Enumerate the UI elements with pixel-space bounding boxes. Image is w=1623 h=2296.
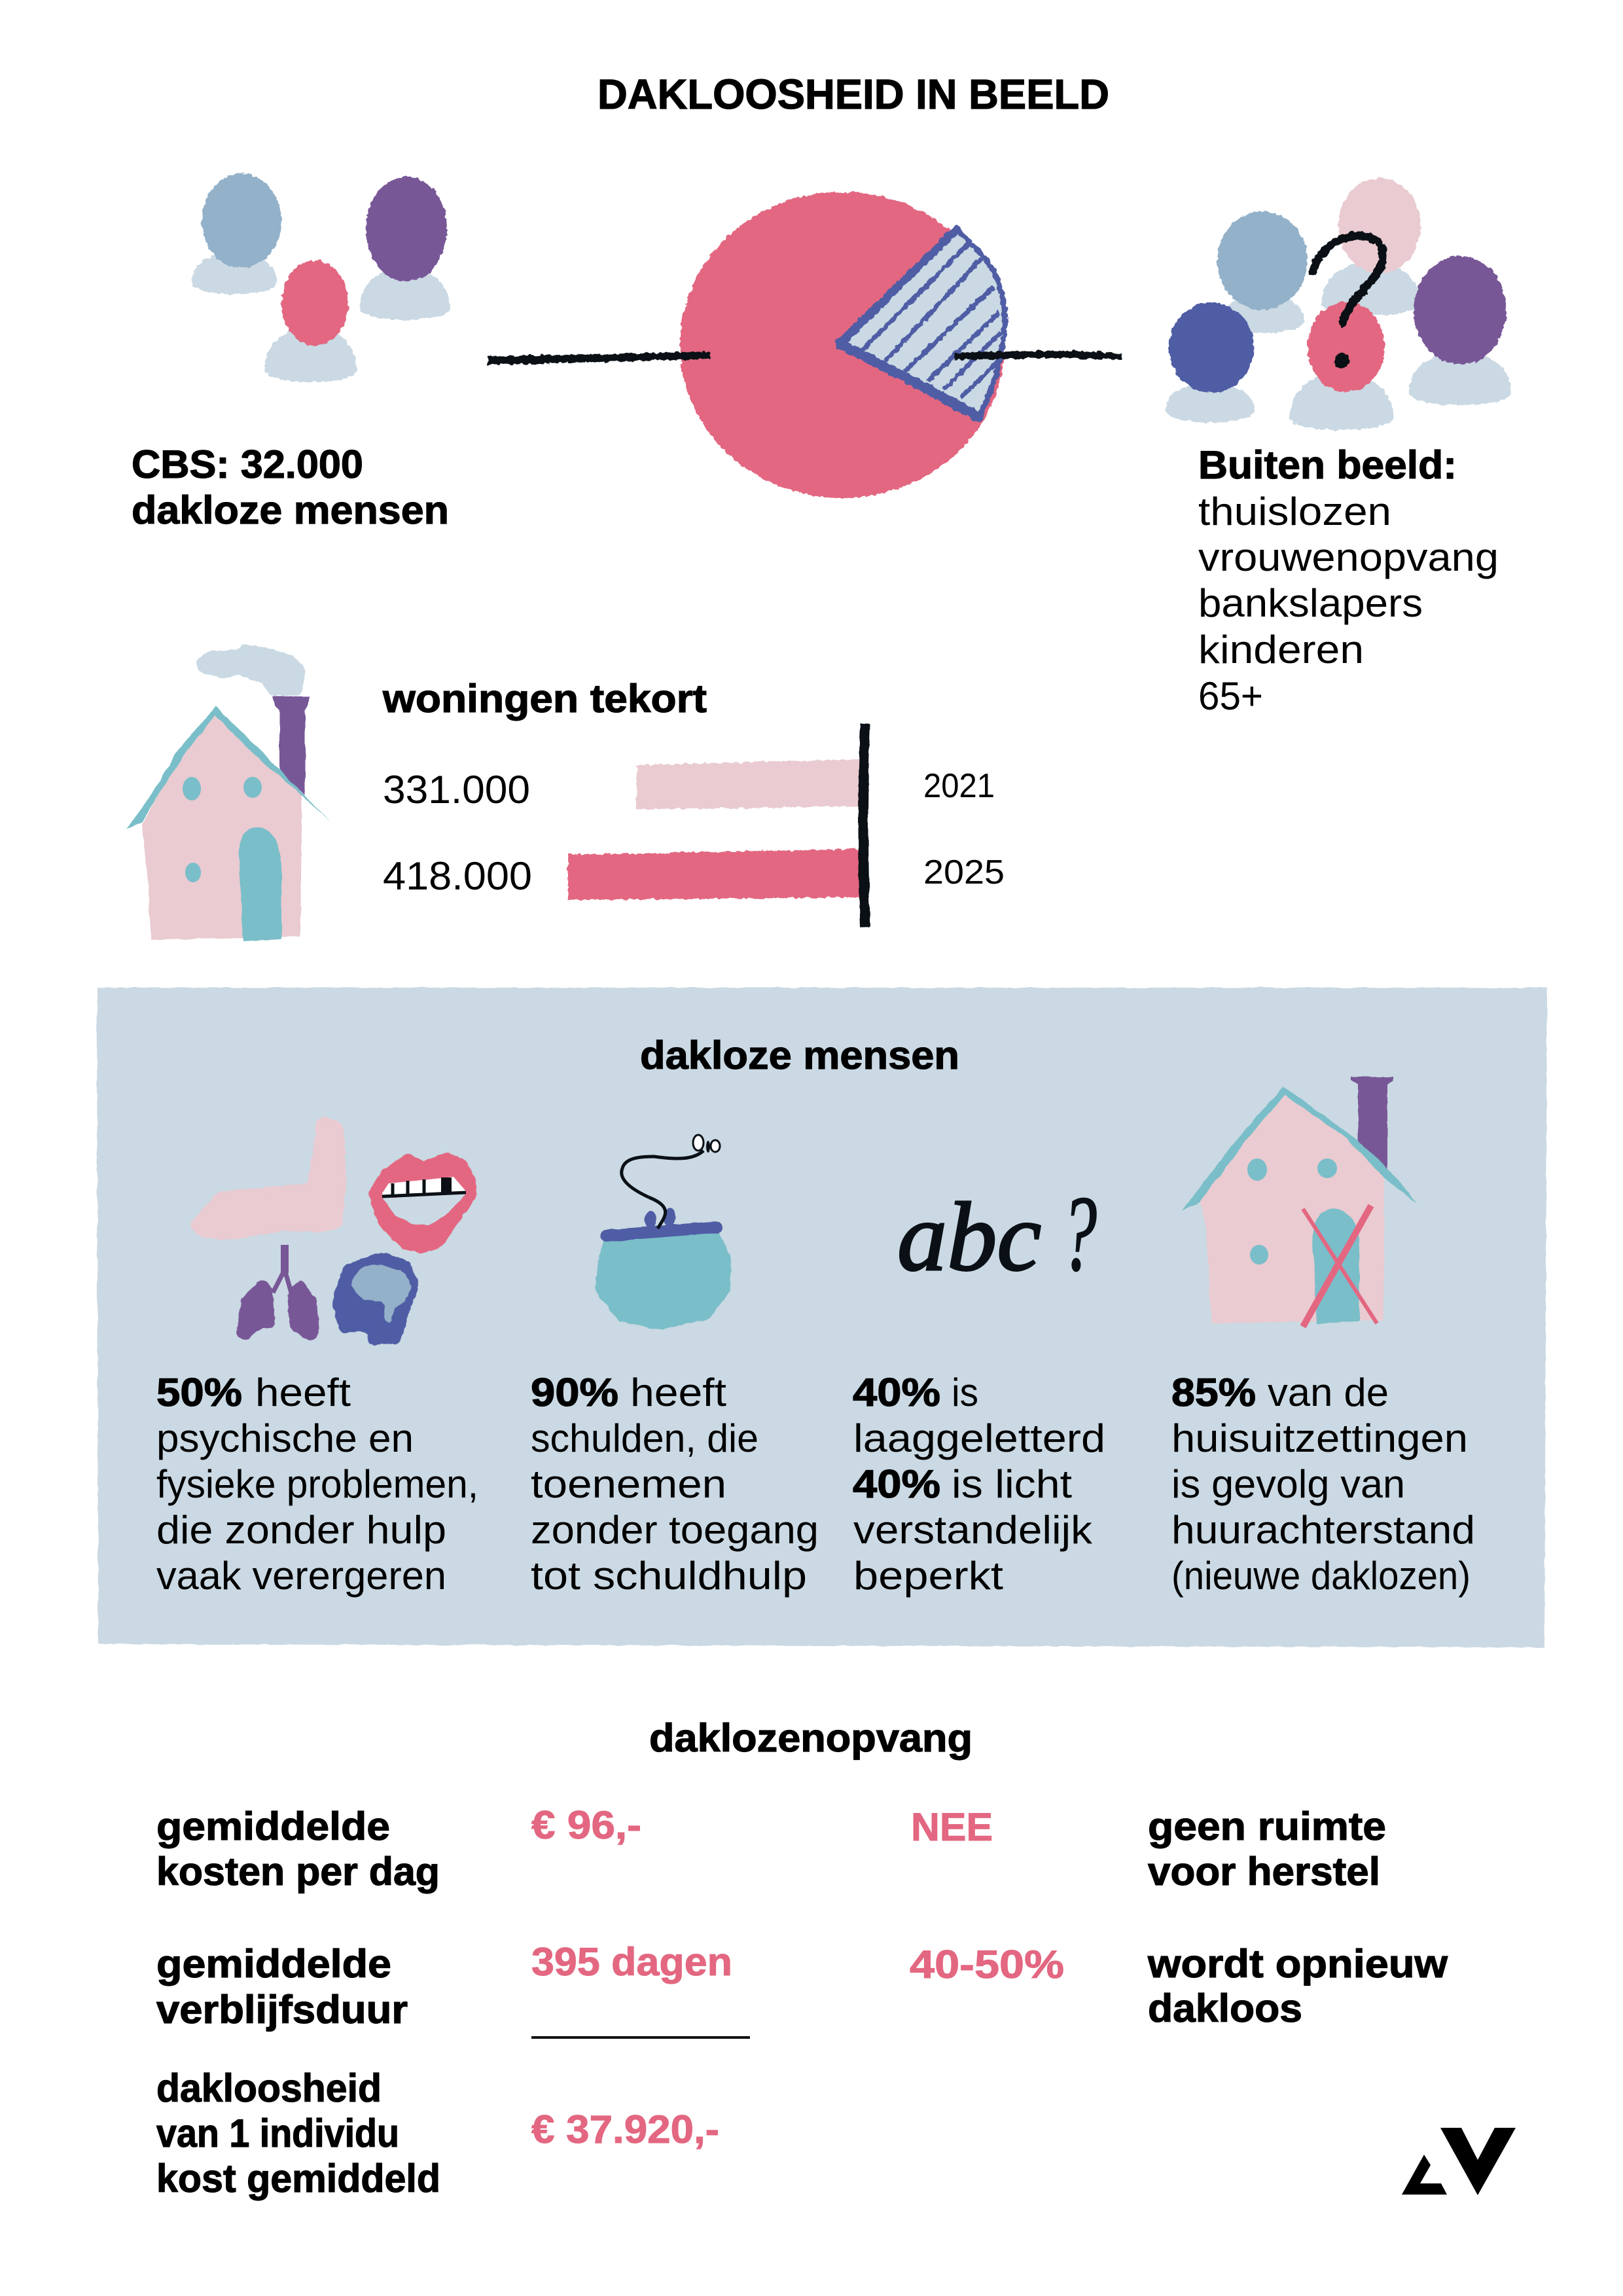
label: cost per individual — [156, 2066, 440, 2200]
label: average stay — [156, 1942, 408, 2032]
text: out of sight list: kinderen — [1198, 628, 1364, 672]
text: psychical problems: vaak verergeren — [156, 1554, 446, 1598]
text: debts: heeft — [630, 1371, 726, 1414]
connector line right — [955, 355, 1122, 357]
title: DAKLOOSHEID IN BEELD — [597, 71, 1109, 118]
text: literacy: 40% — [853, 1371, 940, 1414]
text: literacy: beperkt — [853, 1554, 1003, 1598]
text: CBS count: dakloze mensen — [132, 488, 449, 532]
icon: house with smoke — [126, 643, 331, 941]
icon: handwritten abc question — [897, 1174, 1097, 1293]
text: evictions: van de — [1268, 1371, 1389, 1414]
icon: three people (counted) — [192, 173, 450, 382]
label: cost per individual: kost gemiddeld — [156, 2157, 440, 2200]
value: total cost: € 37.920,- — [531, 2108, 719, 2151]
text: CBS count: CBS: 32.000 — [132, 442, 363, 486]
label: cost per individual: van 1 individu — [156, 2111, 399, 2155]
text: evictions: (nieuwe daklozen) — [1171, 1554, 1471, 1598]
text: out of sight list: 65+ — [1198, 674, 1263, 718]
text: out of sight list: vrouwenopvang — [1198, 535, 1499, 579]
text: literacy: 40% — [853, 1462, 940, 1506]
label: average stay: verblijfsduur — [156, 1988, 408, 2032]
text: psychical problems: die zonder hulp — [156, 1508, 446, 1552]
text: out of sight list: thuislozen — [1198, 490, 1391, 533]
text: out of sight list — [1198, 443, 1499, 718]
icon: empty purse with fly — [595, 1135, 731, 1330]
text: literacy: verstandelijk — [853, 1508, 1093, 1552]
text: debts: schulden, die — [531, 1416, 758, 1460]
text: literacy — [853, 1371, 1105, 1598]
label: cost per individual: dakloosheid — [156, 2066, 382, 2110]
value: NEE: NEE — [911, 1805, 993, 1849]
text: debts: toenemen — [531, 1462, 726, 1506]
icon: house with crossed-out door — [1182, 1077, 1418, 1327]
text: psychical problems: 50% — [156, 1371, 242, 1414]
value: percentage: 40-50% — [910, 1943, 1064, 1986]
label: average stay: gemiddelde — [156, 1942, 391, 1986]
text: out of sight list: bankslapers — [1198, 581, 1423, 625]
icon: arm — [188, 1115, 346, 1240]
panel heading: dakloze mensen — [640, 1033, 959, 1077]
bar chart: housing shortage: 331.000 — [383, 768, 530, 812]
label: no room for recovery — [1148, 1804, 1386, 1893]
text: evictions: is gevolg van — [1171, 1462, 1405, 1506]
text: psychical problems — [156, 1371, 478, 1598]
text: psychical problems: heeft — [255, 1371, 351, 1414]
bar chart: housing shortage — [383, 724, 1005, 927]
text: evictions: huurachterstand — [1171, 1508, 1475, 1552]
bar chart: housing shortage: 418.000 — [383, 854, 532, 898]
text: literacy: is licht — [952, 1462, 1072, 1506]
label: no room for recovery: geen ruimte — [1148, 1804, 1386, 1848]
text: evictions: 85% — [1171, 1371, 1256, 1414]
text: literacy: is — [952, 1371, 978, 1414]
text: debts: 90% — [531, 1371, 618, 1414]
panel: dakloze mensen — [97, 988, 1547, 1647]
text: debts: tot schuldhulp — [531, 1554, 807, 1598]
text: debts: zonder toegang — [531, 1508, 819, 1552]
text: debts — [531, 1371, 819, 1598]
icon: five people with question mark (uncounted) — [1166, 178, 1511, 430]
logo — [1402, 2128, 1516, 2195]
label: homeless again: dakloos — [1148, 1986, 1302, 2030]
text: psychical problems: fysieke problemen, — [156, 1462, 478, 1506]
icon: lungs — [236, 1245, 319, 1342]
text: evictions: huisuitzettingen — [1171, 1416, 1468, 1460]
bar chart: housing shortage: 2025 — [923, 853, 1005, 891]
sum line — [531, 2036, 750, 2039]
label: homeless again: wordt opnieuw — [1147, 1942, 1448, 1986]
icon: head with brain — [332, 1252, 419, 1345]
value: cost per day: € 96,- — [531, 1803, 641, 1847]
text: out of sight list: Buiten beeld: — [1198, 443, 1457, 487]
icon: handwritten abc question: ? — [1061, 1174, 1097, 1293]
heading: housing shortage: woningen tekort — [382, 677, 707, 721]
label: average cost per day: gemiddelde — [156, 1804, 390, 1848]
icon: mouth with bad teeth — [368, 1152, 476, 1253]
heading: daklozenopvang: daklozenopvang — [649, 1716, 972, 1760]
text: literacy: laaggeletterd — [853, 1416, 1105, 1460]
bar chart: housing shortage: 2021 — [923, 767, 995, 805]
text: psychical problems: psychische en — [156, 1416, 414, 1460]
icon: handwritten abc question: abc — [897, 1183, 1041, 1291]
pie chart: counted and uncounted homeless people — [680, 192, 1005, 498]
connector line left — [488, 355, 710, 361]
text: CBS count — [132, 442, 449, 532]
label: homeless again — [1147, 1942, 1448, 2030]
label: average cost per day — [156, 1804, 440, 1893]
label: no room for recovery: voor herstel — [1148, 1850, 1380, 1893]
text: evictions — [1171, 1371, 1475, 1598]
label: average cost per day: kosten per dag — [156, 1850, 440, 1893]
value: days: 395 dagen — [531, 1940, 732, 1984]
